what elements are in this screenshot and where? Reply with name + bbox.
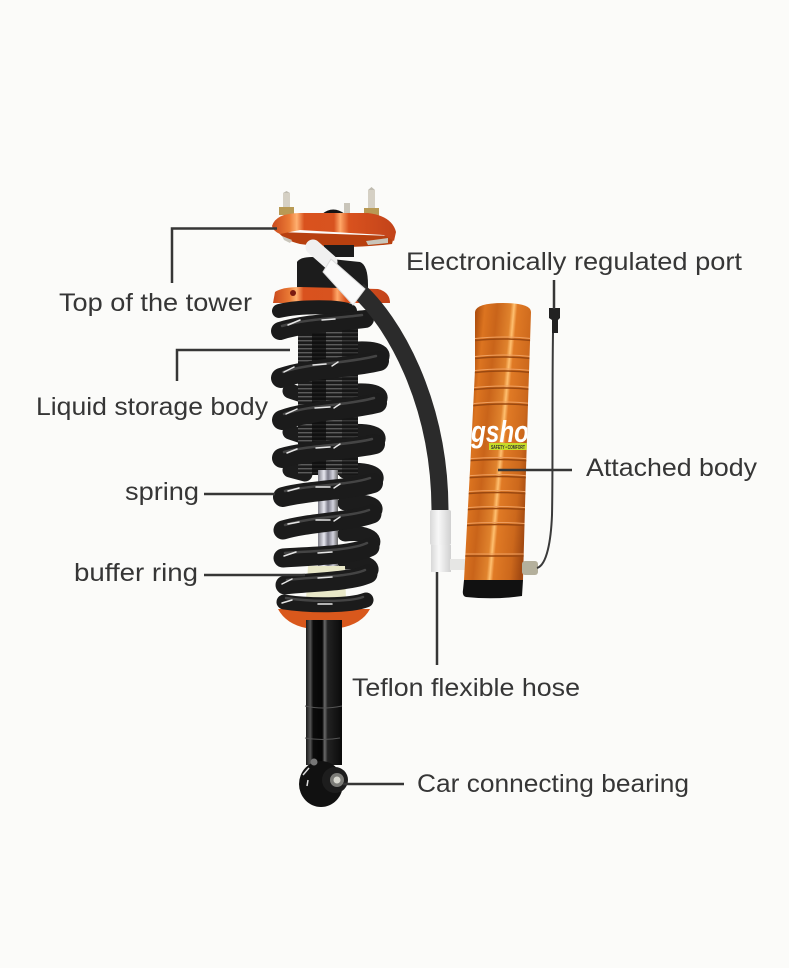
spring seat: [273, 287, 390, 303]
cylinder logo: [471, 420, 528, 450]
label: top of the tower: Top of the tower: [59, 289, 252, 317]
label: liquid storage body: Liquid storage body: [36, 393, 269, 421]
label: teflon flexible hose: Teflon flexible hose: [352, 674, 580, 702]
label: car connecting bearing: Car connecting bearing: [417, 770, 689, 798]
label: spring: spring: [125, 478, 199, 506]
white hose fitting bottom: [430, 510, 465, 572]
port fitting: [522, 561, 538, 575]
callout lines: [172, 228, 572, 784]
threaded reservoir tube: [298, 325, 358, 475]
cylinder logo: gsho: [470, 414, 529, 449]
lower spring cup: [278, 609, 370, 628]
shock absorber assembly: [272, 187, 465, 807]
spring sheen: [282, 315, 376, 601]
top plate: [272, 213, 396, 257]
chrome piston rod: [318, 470, 338, 570]
cylinder black end cap: [463, 580, 523, 598]
upper black body: [297, 257, 368, 292]
mounting studs: [279, 187, 379, 216]
attached body cylinder: [460, 303, 538, 598]
cylinder ribs: [465, 336, 530, 554]
lower eye mount: [299, 758, 348, 807]
lower black shaft: [306, 620, 342, 765]
cylinder logo: SAFETY • COMFORT: [491, 445, 525, 451]
spring coils front: [279, 307, 379, 605]
black hose: [358, 290, 440, 511]
spring coils back: [290, 349, 382, 574]
label: attached body: Attached body: [586, 454, 758, 482]
electronic cable and connector: [537, 308, 560, 568]
spring highlights: [282, 319, 340, 604]
label: electronically regulated port: Electronically regulated port: [406, 248, 742, 276]
label: buffer ring: buffer ring: [74, 559, 198, 587]
white hose fitting top: [313, 247, 365, 305]
buffer ring: [306, 566, 346, 600]
